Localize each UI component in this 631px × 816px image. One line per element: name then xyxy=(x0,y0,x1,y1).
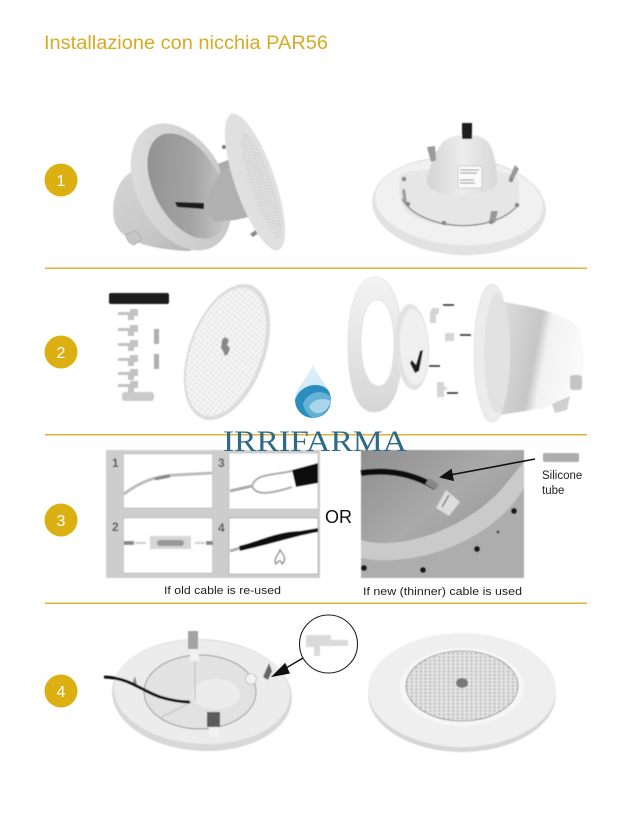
title: Installazione con nicchia PAR56 xyxy=(44,33,328,54)
silicone tube label: Silicone xyxy=(542,470,582,482)
step 2: LED lamp disc xyxy=(167,272,287,432)
OR label: OR xyxy=(325,507,352,527)
divider 3 xyxy=(45,602,587,604)
splice cell 2 xyxy=(124,518,213,573)
splice numbers: 2 xyxy=(112,520,119,534)
caption: new cable: If new (thinner) cable is used xyxy=(363,586,522,598)
step 3: cable splice panel xyxy=(106,450,320,578)
splice cell 4 xyxy=(229,518,318,574)
step 2 badge xyxy=(44,336,78,368)
step 4: lamp rear with clip xyxy=(104,631,295,756)
silicone tube label: tube xyxy=(542,485,564,497)
step 1 badge xyxy=(44,164,78,196)
step 4: assembled lamp front xyxy=(368,633,556,752)
step 1 badge: 1 xyxy=(57,173,66,190)
step 1: niche housing with lamp xyxy=(110,106,297,268)
step 2: parts kit xyxy=(109,293,169,401)
caption: old cable: If old cable is re-used xyxy=(164,585,281,597)
logo wordmark: IRRIFARMA xyxy=(223,425,407,458)
splice cell 3 xyxy=(229,453,318,509)
divider 2 xyxy=(45,434,587,436)
step 1: lamp back view xyxy=(369,123,549,261)
step 3: photo of new cable xyxy=(361,450,524,578)
splice numbers: 4 xyxy=(218,521,225,535)
splice numbers xyxy=(112,456,225,535)
step 4 badge: 4 xyxy=(57,684,66,701)
clip arrow xyxy=(273,658,303,676)
step 2: exploded housing assembly xyxy=(348,277,584,422)
step 2 badge: 2 xyxy=(57,345,66,362)
splice numbers: 1 xyxy=(112,456,119,470)
step 3 badge: 3 xyxy=(57,513,66,530)
step 4 badge xyxy=(44,674,78,708)
magnifier callout: clip detail xyxy=(300,615,358,673)
splice numbers: 3 xyxy=(218,456,225,470)
logo water drop xyxy=(295,364,331,418)
splice cell 1 xyxy=(124,454,212,508)
step 3 badge xyxy=(44,504,78,536)
logo: IRRIFARMA xyxy=(223,364,407,458)
silicone tube sample xyxy=(543,453,579,462)
arrow to silicone tube xyxy=(441,459,535,480)
divider 1 xyxy=(45,268,587,269)
